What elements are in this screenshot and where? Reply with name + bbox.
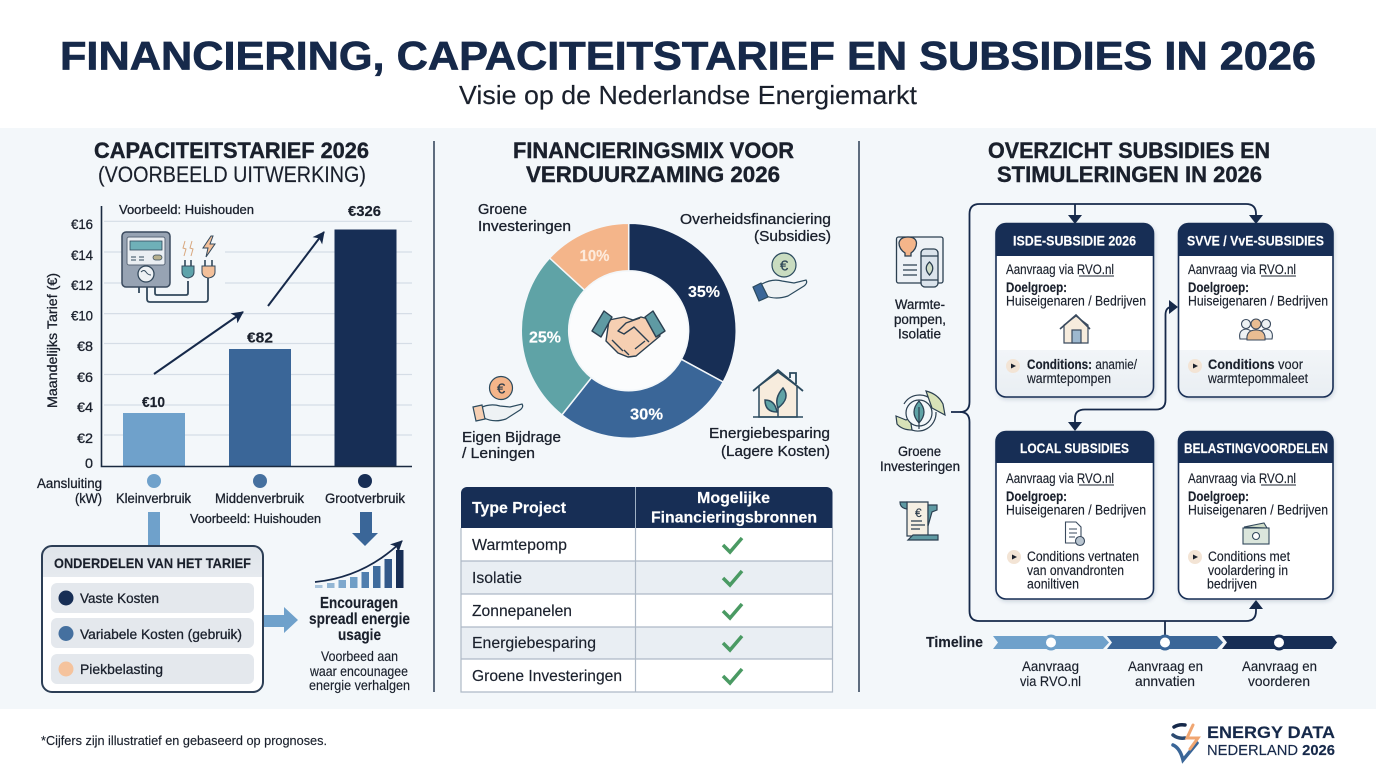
x axis labels: Grootverbruik	[325, 491, 405, 506]
timeline labels: voorderen	[1248, 673, 1310, 689]
bar chart	[37, 202, 412, 506]
icon: house	[1060, 315, 1090, 343]
icon: hand with euro orange	[473, 376, 523, 421]
label: eigen bijdrage: / Leningen	[462, 446, 535, 462]
connectors	[951, 204, 1263, 637]
timeline labels: annvatien	[1135, 673, 1195, 689]
background band	[0, 128, 1376, 709]
x axis labels: Kleinverbruik	[116, 491, 191, 506]
conditions	[1006, 357, 1137, 386]
heading: financieringsmix	[513, 138, 794, 187]
conditions	[1007, 549, 1139, 592]
y axis labels	[71, 216, 93, 471]
table header: Mogelijke	[697, 490, 770, 507]
arrow: stijging klein naar midden	[154, 312, 243, 374]
percentages: 10%	[580, 248, 610, 265]
icon: groene cyclus	[896, 391, 945, 431]
text: encouragen: Encouragen	[320, 595, 398, 612]
timeline labels: Aanvraag	[1022, 658, 1079, 674]
card title: BELASTINGVOORDELEN	[1184, 440, 1328, 456]
timeline labels: via RVO.nl	[1020, 673, 1081, 689]
heading: onderdelen: ONDERDELEN VAN HET TARIEF	[54, 555, 251, 571]
table: financieringsbronnen	[461, 487, 832, 692]
card: belastingvoordelen	[1178, 432, 1333, 599]
x axis labels: (kW)	[75, 491, 102, 506]
label: warmtepompen isolatie	[894, 297, 946, 342]
timeline segment 2	[1107, 636, 1223, 649]
card body: Aanvraag via RVO.nl	[1006, 471, 1114, 486]
text: encouragen	[309, 595, 410, 693]
value labels: €10	[142, 395, 165, 411]
heading: subsidies: OVERZICHT SUBSIDIES EN	[988, 138, 1270, 163]
footnote: *Cijfers zijn illustratief en gebaseerd op prognoses.	[41, 733, 327, 748]
percentages: 35%	[688, 284, 720, 301]
card title: LOCAL SUBSIDIES	[1020, 440, 1129, 456]
segment: groene investeringen 10%	[550, 223, 629, 290]
card: svve vve-subsidies	[1178, 224, 1333, 397]
item: vaste kosten	[51, 583, 254, 613]
percentages	[529, 248, 720, 424]
label: warmtepompen isolatie: Warmte-	[895, 297, 945, 312]
table rows: Isolatie	[472, 570, 522, 587]
text: encouragen: energie verhalgen	[309, 677, 410, 693]
heading: capaciteitstarief	[94, 138, 369, 187]
table header: Financieringsbronnen	[651, 510, 817, 526]
label: groene investeringen: Groene	[478, 202, 527, 218]
icon: hand with euro orange: €	[497, 380, 506, 398]
table rows: Energiebesparing	[472, 635, 596, 652]
table header: Type Project	[472, 500, 567, 517]
icon: hand with euro green: €	[780, 258, 789, 274]
card body: Huiseigenaren / Bedrijven	[1188, 294, 1328, 308]
panel: subsidies	[880, 138, 1337, 689]
timeline labels	[1020, 658, 1317, 689]
y axis labels: €16	[71, 216, 93, 232]
card body: Huiseigenaren / Bedrijven	[1006, 294, 1146, 308]
x axis labels	[37, 476, 405, 506]
arrow: onderdelen naar stimulans	[264, 607, 298, 633]
panel: capaciteitstarief	[37, 138, 412, 693]
table rows	[472, 537, 622, 685]
y axis labels: €4	[77, 399, 93, 415]
logo	[1173, 723, 1335, 760]
heading: capaciteitstarief: CAPACITEITSTARIEF 2026	[94, 138, 369, 163]
label: groene investeringen: Groene	[898, 444, 941, 459]
conditions	[1188, 549, 1290, 592]
arrow: stijging midden naar groot	[268, 232, 324, 306]
bar: middenverbruik	[229, 349, 291, 466]
conditions: warmtepompen	[1026, 371, 1111, 386]
card body: Huiseigenaren / Bedrijven	[1188, 502, 1328, 518]
card body: Doelgroep:	[1006, 489, 1067, 504]
icon: hand with euro green	[753, 253, 807, 301]
card body: Doelgroep:	[1006, 280, 1067, 295]
bar: kleinverbruik	[123, 413, 185, 466]
bar: grootverbruik	[334, 230, 396, 466]
conditions	[1188, 357, 1308, 386]
card body: Aanvraag via RVO.nl	[1188, 471, 1296, 486]
text: encouragen: waar encounagee	[309, 663, 408, 679]
legend dots	[147, 474, 372, 488]
card body	[1006, 471, 1146, 518]
icon: document	[1066, 522, 1084, 546]
table rows: Zonnepanelen	[472, 603, 572, 620]
heading: financieringsmix: VERDUURZAMING 2026	[526, 162, 780, 187]
x axis labels: Middenverbruik	[215, 491, 304, 506]
card title: ISDE-SUBSIDIE 2026	[1013, 232, 1136, 248]
icon: meter with plugs	[122, 232, 215, 302]
label: groene investeringen: Investeringen	[880, 459, 960, 474]
item: piekbelasting: Piekbelasting	[80, 661, 163, 677]
card title: SVVE / VvE-SUBSIDIES	[1187, 232, 1324, 248]
item: variabele kosten	[51, 618, 254, 648]
text: encouragen: usagie	[338, 627, 381, 644]
card: local subsidies	[996, 432, 1154, 599]
conditions: Conditions: anamie/	[1027, 357, 1137, 372]
title: FINANCIERING, CAPACITEITSTARIEF EN SUBSIDIES IN 2026	[60, 34, 1316, 78]
label: groene investeringen: Investeringen	[478, 219, 571, 235]
label: overheidsfinanciering	[680, 212, 831, 245]
chart note: Voorbeeld: Huishouden	[119, 202, 254, 217]
check marks	[723, 538, 742, 683]
label: groene investeringen	[880, 444, 960, 474]
logo subtext: NEDERLAND 2026	[1207, 742, 1335, 759]
heading: subsidies	[988, 138, 1270, 187]
heading: capaciteitstarief: (VOORBEELD UITWERKING)	[98, 162, 366, 187]
icon: house with leaf	[753, 370, 803, 417]
value labels	[142, 204, 381, 411]
x axis labels: Aansluiting	[37, 476, 102, 491]
text: encouragen: Voorbeed aan	[321, 648, 398, 664]
subtitle: Visie op de Nederlandse Energiemarkt	[459, 80, 918, 110]
label: energiebesparing	[709, 426, 830, 460]
label: overheidsfinanciering: (Subsidies)	[754, 229, 831, 245]
label: warmtepompen isolatie: pompen,	[894, 312, 946, 327]
text: encouragen: spreadl energie	[309, 611, 410, 628]
conditions: aoniltiven	[1027, 576, 1079, 592]
heading: subsidies: STIMULERINGEN IN 2026	[997, 162, 1262, 187]
table rows: Groene Investeringen	[472, 668, 622, 685]
logo text: ENERGY DATA	[1207, 723, 1335, 742]
timeline labels: Aanvraag en	[1128, 658, 1203, 674]
y axis title: Maandelijks Tarief (€)	[44, 273, 60, 408]
item: vaste kosten: Vaste Kosten	[80, 590, 159, 606]
icon: warmtepomp	[896, 237, 943, 287]
item: variabele kosten: Variabele Kosten (gebruik)	[80, 626, 242, 642]
card body: Aanvraag via RVO.nl	[1188, 262, 1296, 277]
segment: eigen bijdrage 25%	[521, 258, 591, 415]
timeline segment 1	[993, 636, 1109, 649]
icon: handshake	[592, 311, 665, 357]
y axis labels: 0	[85, 455, 93, 471]
icon: money	[1243, 523, 1269, 544]
label: eigen bijdrage	[462, 430, 561, 462]
timeline segment 3	[1222, 636, 1337, 649]
y axis labels: €8	[77, 338, 93, 354]
donut chart	[521, 223, 736, 438]
y axis labels: €6	[77, 369, 93, 385]
card body: Aanvraag via RVO.nl	[1006, 262, 1114, 277]
segment: energiebesparing 30%	[562, 359, 723, 438]
table header	[472, 490, 817, 526]
panel: financieringsmix	[461, 138, 832, 692]
icon: logo mark	[1173, 725, 1198, 760]
value labels: €326	[348, 204, 381, 220]
label: groene investeringen	[478, 202, 571, 235]
conditions: Conditions vertnaten	[1027, 549, 1139, 564]
label: energiebesparing: (Lagere Kosten)	[721, 444, 830, 460]
value labels: €82	[247, 330, 273, 346]
percentages: 30%	[630, 406, 663, 424]
panel: onderdelen van het tarief	[42, 546, 263, 692]
percentages: 25%	[529, 330, 561, 346]
note: voorbeeld huishouden: Voorbeeld: Huishouden	[190, 511, 321, 526]
label: eigen bijdrage: Eigen Bijdrage	[462, 430, 561, 446]
conditions: Conditions met	[1208, 549, 1290, 564]
card body	[1188, 262, 1328, 308]
arrow: groot naar stimulans	[352, 512, 378, 546]
conditions: van onvandronten	[1027, 563, 1124, 578]
timeline	[926, 634, 1337, 689]
conditions: Conditions voor	[1208, 357, 1303, 372]
card body: Doelgroep:	[1188, 280, 1249, 295]
item: piekbelasting	[51, 654, 254, 684]
connector: klein naar onderdelen	[148, 512, 160, 546]
divider left	[433, 141, 435, 692]
card body	[1006, 262, 1146, 308]
arrow heads	[1068, 215, 1263, 609]
y axis labels: €14	[71, 247, 93, 263]
card body: Huiseigenaren / Bedrijven	[1006, 502, 1146, 518]
y axis labels: €2	[77, 430, 93, 446]
icon: rising bars	[315, 541, 404, 588]
conditions: voolardering in	[1208, 563, 1288, 578]
heading: financieringsmix: FINANCIERINGSMIX VOOR	[513, 138, 794, 163]
card body: Doelgroep:	[1188, 489, 1249, 504]
label: warmtepompen isolatie: Isolatie	[898, 326, 941, 342]
conditions: warmtepommaleet	[1207, 371, 1308, 386]
timeline markers	[1044, 636, 1286, 649]
conditions: bedrijven	[1207, 576, 1257, 592]
segment: overheidsfinanciering 35%	[629, 223, 736, 382]
card: isde-subsidie	[996, 224, 1154, 397]
timeline label: Timeline	[926, 634, 983, 651]
card body	[1188, 471, 1328, 518]
label: energiebesparing: Energiebesparing	[709, 426, 830, 442]
y axis labels: €10	[71, 308, 93, 324]
label: overheidsfinanciering: Overheidsfinanciering	[680, 212, 831, 228]
y axis labels: €12	[71, 277, 93, 293]
timeline labels: Aanvraag en	[1242, 658, 1317, 674]
icon: document scroll	[900, 502, 938, 540]
table rows: Warmtepomp	[472, 537, 567, 554]
divider right	[858, 141, 860, 692]
icon: people	[1240, 319, 1272, 340]
icon: document scroll: €	[915, 506, 922, 520]
